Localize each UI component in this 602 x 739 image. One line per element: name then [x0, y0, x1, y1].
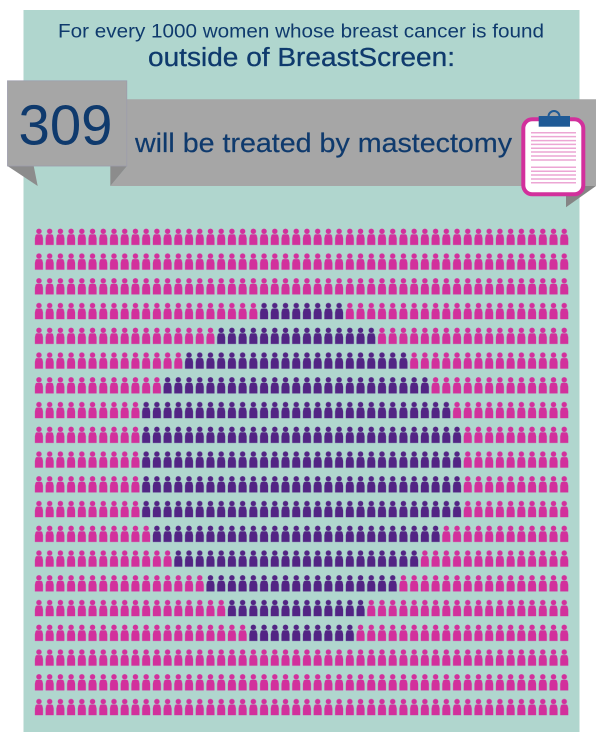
- clipboard board: [523, 119, 583, 194]
- clipboard ring: [548, 111, 560, 118]
- ribbon band: [110, 99, 596, 186]
- clipboard clip: [539, 116, 570, 127]
- heading: [58, 20, 544, 72]
- number 309: 309: [18, 94, 112, 158]
- purple figures: 309 treated by mastectomy: [141, 302, 462, 649]
- heading line 2: outside of BreastScreen:: [148, 44, 455, 72]
- clipboard text lines: [531, 133, 576, 183]
- middle ribbon fold: [110, 166, 127, 186]
- pink figures: all women: [34, 228, 570, 723]
- left ribbon fold: [8, 166, 38, 186]
- ribbon banner: [8, 81, 596, 207]
- banner text: will be treated by mastectomy: [134, 128, 513, 158]
- icon: clipboard: [523, 111, 583, 194]
- number box: [8, 81, 127, 166]
- heading line 1: For every 1000 women whose breast cancer is found: [58, 20, 544, 42]
- right ribbon fold: [566, 186, 596, 207]
- pictogram grid of 1000 women: [34, 228, 570, 723]
